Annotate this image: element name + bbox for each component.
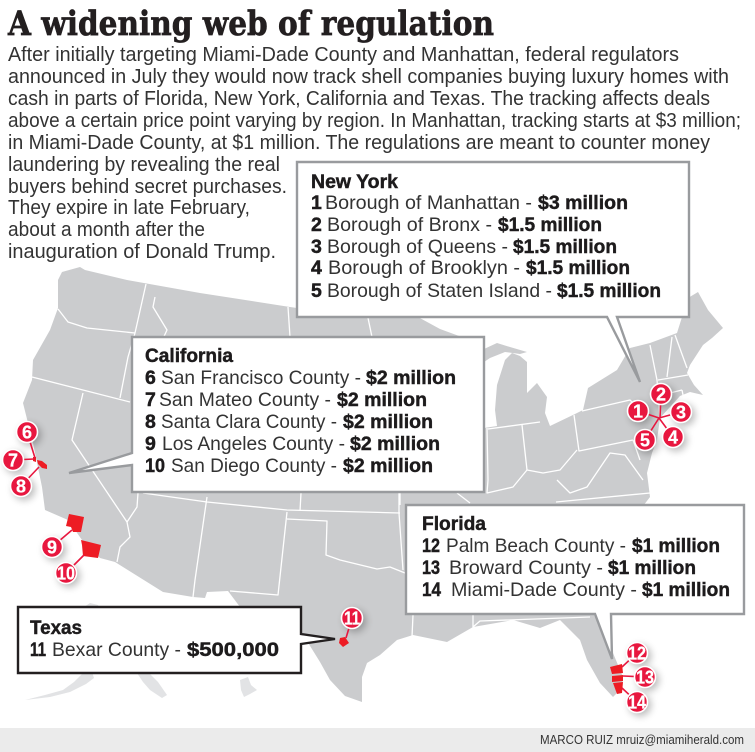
inset: Alaska and Hawaii [25, 603, 257, 700]
callout: California: Santa Clara County - [161, 411, 337, 433]
callout: Florida: Miami-Dade County - [451, 579, 637, 601]
callout: Florida: $1 million [642, 579, 730, 601]
callout: California [69, 337, 484, 492]
callout: California: $2 million [343, 455, 433, 477]
markers: Florida: 13 [636, 668, 654, 688]
callout: Florida: Palm Beach County - [446, 535, 626, 557]
footer credit [0, 728, 755, 752]
intro text [8, 44, 741, 263]
highlighted counties [33, 457, 623, 694]
marker: Texas [342, 608, 366, 638]
callout: Florida: Broward County - [449, 557, 603, 579]
callout: New York: $1.5 million [557, 280, 661, 302]
callout: California: 7 [145, 389, 156, 411]
callout: Florida: 12 [422, 535, 440, 557]
callout: California: $2 million [350, 433, 440, 455]
intro text: about a month after the [8, 219, 205, 241]
callout: New York: Borough of Brooklyn - [328, 257, 520, 279]
intro text: cash in parts of Florida, New York, California and Texas. The tracking affects deals [8, 88, 710, 110]
marker: Texas: 11 [344, 608, 360, 628]
callout: New York: Borough of Manhattan - [325, 192, 532, 214]
intro text: in Miami-Dade County, at $1 million. The regulations are meant to counter money [8, 132, 710, 154]
callout: California: 8 [145, 411, 156, 433]
callout: California: $2 million [366, 367, 456, 389]
markers: California [2, 422, 84, 587]
intro text: buyers behind secret purchases. [8, 176, 287, 198]
intro text: announced in July they would now track shell companies buying luxury homes with [8, 66, 729, 88]
callout: New York: $3 million [538, 192, 628, 214]
intro text: inauguration of Donald Trump. [8, 241, 276, 263]
callout: Florida: $1 million [632, 535, 720, 557]
footer credit: MARCO RUIZ mruiz@miamiherald.com [540, 733, 744, 747]
markers: California: 9 [47, 538, 57, 558]
callout: California: San Diego County - [171, 455, 337, 477]
callout: California: 10 [145, 455, 165, 477]
callout: California: California [145, 345, 233, 367]
callout: California: San Francisco County - [161, 367, 361, 389]
callout: California: Los Angeles County - [162, 433, 345, 455]
callout: New York: $1.5 million [526, 257, 630, 279]
callout: New York: 3 [311, 236, 322, 258]
callout: California: $2 million [343, 411, 433, 433]
callout: New York: $1.5 million [513, 236, 617, 258]
markers: California: 6 [22, 422, 32, 442]
callout: Texas: 11 [30, 639, 46, 661]
intro text: laundering by revealing the real [8, 154, 280, 176]
callout: Texas: Texas [30, 617, 82, 639]
markers: California: 10 [57, 564, 75, 584]
callout: California: 9 [145, 433, 156, 455]
callout: New York: 4 [311, 257, 322, 279]
markers: New York: 1 [633, 402, 643, 422]
callout: New York: 2 [311, 214, 322, 236]
callout: California: San Mateo County - [159, 389, 331, 411]
callout: Texas [18, 607, 335, 673]
markers: Florida [622, 642, 659, 716]
callout: New York: Borough of Staten Island - [327, 280, 552, 302]
callout: Florida: $1 million [608, 557, 696, 579]
callout: Texas: Bexar County - [52, 639, 181, 661]
callout: New York: 5 [311, 280, 322, 302]
title: A widening web of regulation [7, 4, 494, 44]
markers: New York [628, 384, 695, 454]
callout: New York [297, 162, 689, 382]
markers: New York: 5 [640, 430, 650, 450]
intro text: They expire in late February, [8, 197, 250, 219]
callout: California: 6 [145, 367, 156, 389]
callout: New York: Borough of Queens - [327, 236, 508, 258]
callout: California: $2 million [337, 389, 427, 411]
state borders [32, 284, 688, 637]
markers: New York: 2 [656, 384, 666, 404]
callout: New York: 1 [311, 192, 322, 214]
callout: New York: New York [311, 171, 398, 193]
callout: New York: $1.5 million [498, 214, 602, 236]
markers: California: 8 [16, 476, 26, 496]
markers: Florida: 12 [628, 644, 646, 664]
callout: Florida: 13 [422, 557, 440, 579]
intro text: After initially targeting Miami-Dade County and Manhattan, federal regulators [8, 44, 679, 66]
callout: Texas: $500,000 [187, 639, 279, 661]
callout: New York: Borough of Bronx - [327, 214, 492, 236]
callout: Florida: Florida [422, 513, 486, 535]
map: United States [23, 267, 723, 702]
callout: Florida: 14 [422, 579, 441, 601]
markers: New York: 4 [668, 428, 678, 448]
callout: Florida [406, 505, 744, 659]
markers: California: 7 [8, 450, 18, 470]
markers: New York: 3 [676, 402, 686, 422]
markers: Florida: 14 [628, 692, 646, 712]
